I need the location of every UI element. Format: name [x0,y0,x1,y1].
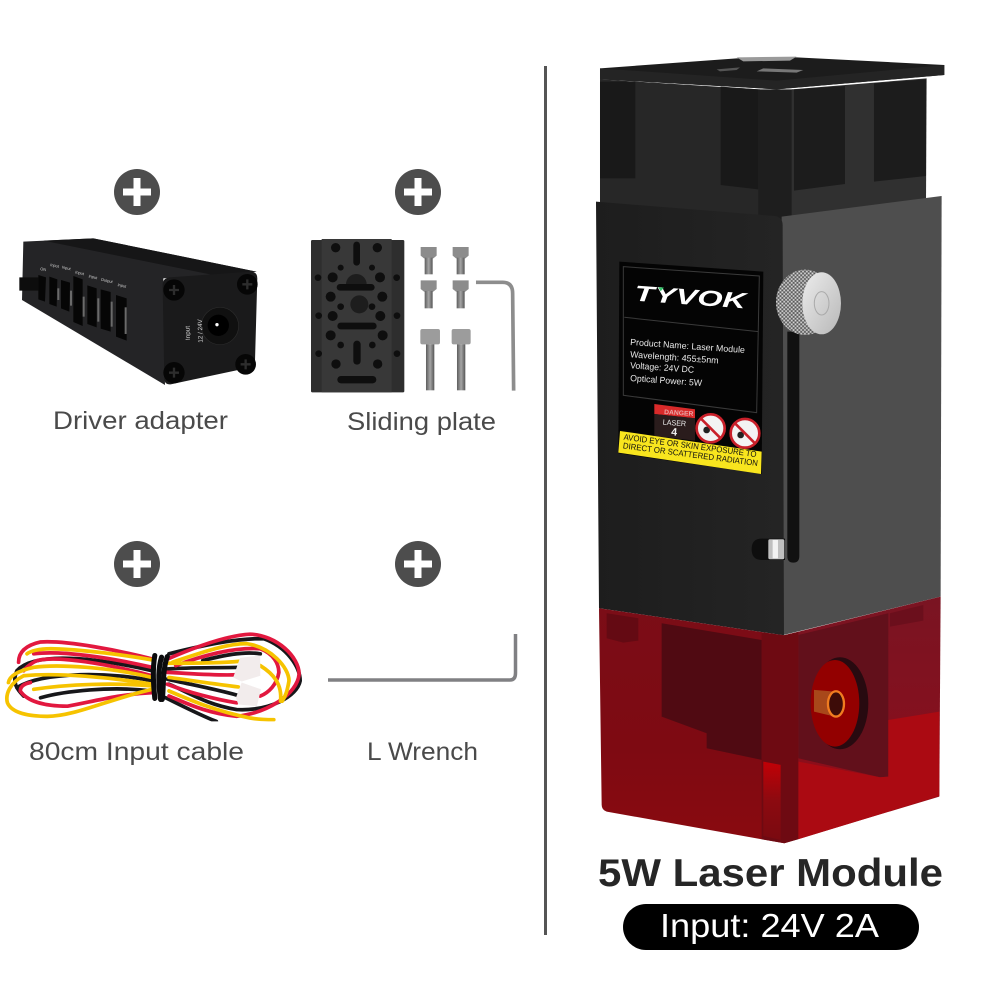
red cover front face [599,608,784,843]
brand logo [634,281,750,314]
adapter top edge [43,238,257,275]
vertical divider [544,66,547,935]
red bright floor [798,712,939,839]
label: driver adapter: Driver adapter [53,407,228,435]
fan left face [600,79,760,223]
danger badge: 4 [671,426,678,439]
laser module product image [596,57,944,843]
warning strip text: DIRECT OR SCATTERED RADIATION [622,440,759,468]
locating pin [752,539,785,560]
slot in block [787,332,799,563]
adapter port labels: Input [50,262,60,269]
thumb screw [776,270,841,335]
plus icon: sliding plate [395,169,441,215]
sliding plate product image [311,239,514,392]
fan left recess [600,82,758,189]
adapter input text: Input [184,326,192,340]
fan grille highlights [717,57,803,73]
adapter port labels: Input [75,269,85,276]
plate body [311,240,404,392]
adapter input text [184,318,205,343]
spec text: Optical Power: 5W [630,373,703,388]
label divider [624,317,758,332]
adapter input text: 12 / 24V [197,318,205,343]
adapter port labels: Input [117,282,128,289]
long screws [420,329,471,390]
yellow warning strip [618,431,762,474]
input cable product image [7,634,300,721]
pill text: Input: 24V 2A [660,907,879,944]
spec text: Wavelength: 455±5nm [630,349,719,365]
fan top plate [600,57,944,89]
plus icon: input cable [114,541,160,587]
cable connector top [233,655,260,682]
fan corner post [758,89,793,223]
plus icon: driver adapter [114,169,160,215]
wrench shaft [328,634,516,680]
adapter switch [19,277,38,291]
adapter power jack [201,307,239,345]
adapter port labels: ON [40,266,47,272]
small hex wrench [476,282,514,391]
plus icon: L wrench [395,541,441,587]
red cover right face [784,597,941,843]
adapter ports [38,275,127,341]
adapter side face [22,238,257,385]
cable black wires [15,639,300,721]
warning strip text: AVOID EYE OR SKIN EXPOSURE TO [623,432,758,459]
cable yellow wires [7,644,289,720]
module title: 5W Laser Module [598,852,943,895]
label: sliding plate: Sliding plate [347,408,496,436]
spec text: Product Name: Laser Module [630,337,745,355]
adapter port labels: Input [61,264,72,271]
red cover top-right tab [890,605,923,627]
cable connector bottom [236,683,261,706]
danger badge: LASER [663,418,687,428]
input spec pill [623,904,919,950]
red inner mount [798,613,888,777]
warning icon: eye hazard [697,414,725,442]
danger badge [654,404,695,441]
block right face [782,196,942,635]
adapter port labels: Input [88,273,99,280]
adapter port highlights [57,288,127,334]
spec text: Voltage: 24V DC [630,360,695,375]
red cover top-left tab [607,613,638,643]
driver adapter product image [19,238,258,385]
lens window [811,657,868,749]
fan right face [792,78,927,223]
L wrench product image [328,634,516,680]
brand logo: TYVOK [634,281,750,314]
red cover inner shadow [662,623,762,760]
adapter end face [163,272,257,384]
adapter port labels: Output [100,277,114,284]
spec text [630,337,745,388]
label: L wrench: L Wrench [367,738,478,766]
product label plate [618,262,763,474]
cable red wires [19,634,299,716]
plate centre section [322,239,392,392]
fan right recess [794,79,926,191]
warning icon: skin hazard [731,419,759,448]
danger badge: DANGER [664,409,694,418]
adapter port labels [40,262,128,289]
short screws [421,247,469,308]
block front face [596,202,784,635]
fan plate lip [600,65,944,89]
plate holes [315,242,400,383]
adapter corner screws [163,274,258,383]
label border [623,267,759,413]
label: input cable: 80cm Input cable [29,738,244,766]
cable tie [153,655,167,699]
red cover corner edge [762,632,798,843]
